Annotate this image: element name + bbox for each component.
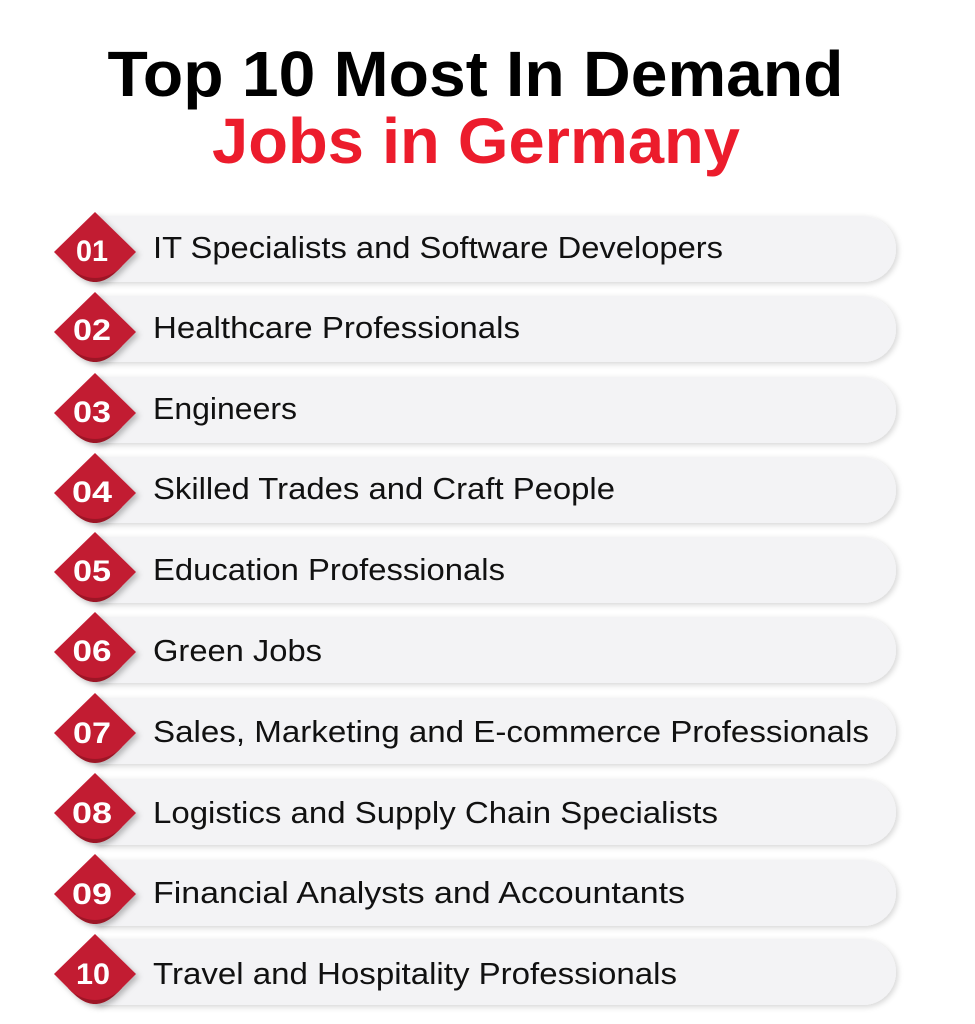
list row 10: 10	[76, 958, 110, 991]
title: Top 10 Most In Demand	[108, 38, 844, 110]
list row 02: 02	[73, 314, 111, 347]
list row 05: 05	[73, 555, 111, 588]
list row 04: 04	[72, 476, 112, 509]
list row 09: 09	[72, 878, 112, 911]
list row 04	[54, 453, 896, 523]
list row 06	[54, 612, 896, 683]
list row 01: 01	[76, 235, 108, 268]
list row 02: Healthcare Professionals	[153, 310, 520, 345]
title	[108, 38, 844, 177]
list row 09	[54, 854, 896, 926]
list row 08: Logistics and Supply Chain Specialists	[153, 795, 718, 830]
list row 04: Skilled Trades and Craft People	[153, 471, 615, 506]
list row 08: 08	[72, 797, 112, 830]
list row 09: Financial Analysts and Accountants	[153, 875, 685, 910]
list row 01: IT Specialists and Software Developers	[153, 230, 723, 265]
list row 05	[54, 532, 896, 603]
list row 02	[54, 292, 896, 362]
list row 03: 03	[73, 396, 111, 429]
list row 07: 07	[73, 717, 111, 750]
list row 01	[54, 212, 896, 282]
list row 05: Education Professionals	[153, 552, 505, 587]
title: Jobs in Germany	[212, 105, 740, 177]
list row 08	[54, 773, 896, 845]
list row 10: Travel and Hospitality Professionals	[153, 956, 677, 991]
list row 03	[54, 373, 896, 443]
list row 07	[54, 693, 896, 764]
list row 10	[54, 934, 896, 1005]
list row 06: 06	[72, 635, 112, 668]
list row 03: Engineers	[153, 391, 297, 426]
list row 06: Green Jobs	[153, 633, 322, 668]
list row 07: Sales, Marketing and E-commerce Professionals	[153, 714, 869, 749]
